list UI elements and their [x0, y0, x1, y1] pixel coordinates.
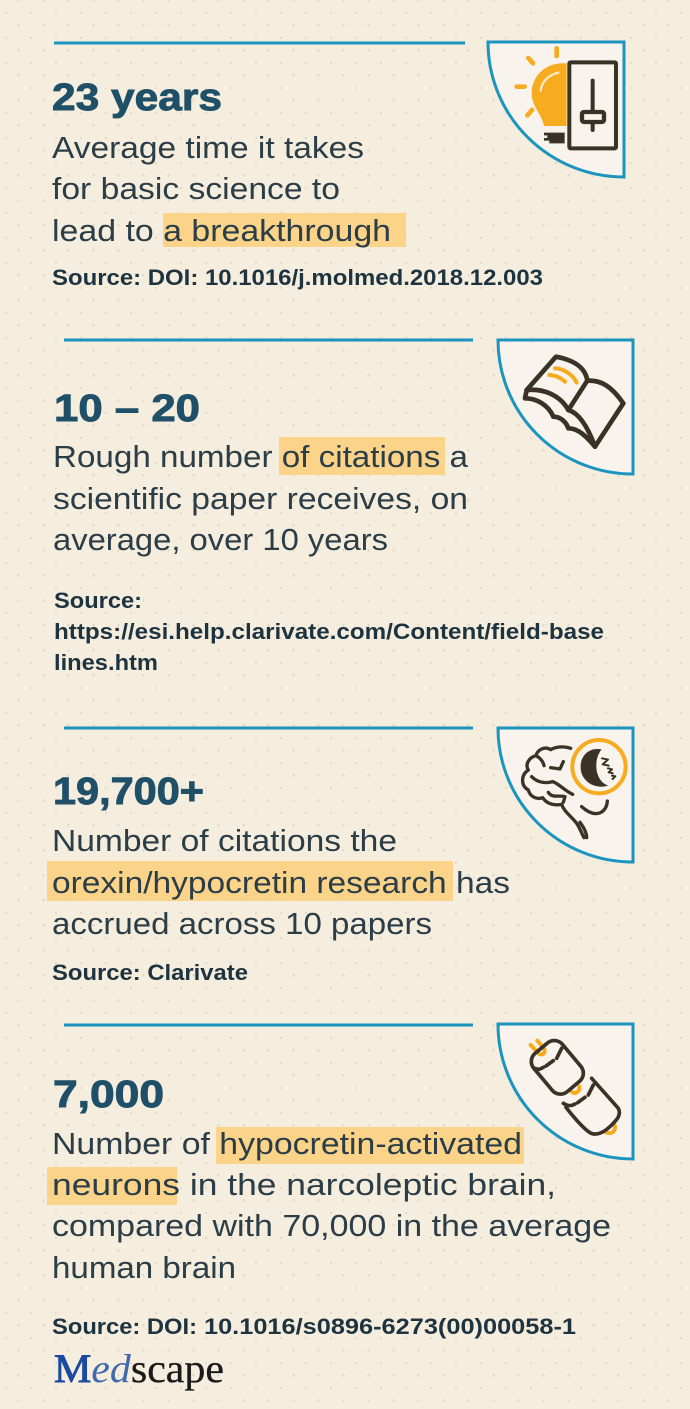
icon: open book — [498, 340, 633, 474]
text: description: Number of citations the — [52, 823, 397, 858]
text: description: lead to a breakthrough — [52, 213, 391, 248]
icon: neuron links — [498, 1024, 633, 1159]
text: description — [52, 130, 391, 248]
highlight: neurons — [47, 1167, 177, 1205]
icon: light bulb and switch — [488, 42, 624, 177]
text: description: for basic science to — [52, 171, 340, 206]
icon: brain and moon — [498, 728, 633, 862]
source: 10.1016/s0896-6273(00)00058-1 — [204, 1314, 576, 1339]
text: description — [53, 439, 469, 557]
heading: 19,700+: 19,700+ — [53, 771, 204, 813]
heading: 10 – 20: 10 – 20 — [54, 388, 200, 430]
logo: Medscape: Medscape — [54, 1346, 224, 1391]
text: description: neurons in the narcoleptic brain, — [52, 1167, 556, 1202]
source: Source: DOI: — [52, 1314, 197, 1339]
heading: 7,000: 7,000 — [53, 1074, 164, 1116]
text: description — [52, 1126, 611, 1285]
text: description: average, over 10 years — [53, 522, 388, 557]
source: lines.htm — [54, 650, 158, 675]
panel: 10 to 20 — [53, 338, 633, 675]
heading: 23 years: 23 years — [52, 77, 222, 119]
text: description: Average time it takes — [52, 130, 364, 165]
highlight: of citations — [279, 437, 445, 475]
source: Source: — [54, 588, 142, 613]
source — [54, 588, 604, 675]
source: Source: Clarivate — [52, 960, 248, 985]
source: Source: DOI: 10.1016/j.molmed.2018.12.003 — [52, 265, 543, 290]
text: description: scientific paper receives, on — [53, 481, 468, 516]
source: https://esi.help.clarivate.com/Content/field-base — [54, 619, 604, 644]
panel: 19,700+ — [47, 726, 633, 985]
text: description: Rough number of citations a — [53, 439, 469, 474]
text: description: orexin/hypocretin research has — [52, 865, 510, 900]
highlight: hypocretin-activated — [216, 1127, 524, 1164]
highlight: a breakthrough — [163, 213, 406, 247]
text: description: accrued across 10 papers — [52, 906, 432, 941]
text: description: compared with 70,000 in the average — [52, 1208, 611, 1243]
panel: 7,000 — [47, 1024, 633, 1339]
text: description: Number of hypocretin-activated — [52, 1126, 522, 1161]
highlight: orexin/hypocretin research — [47, 861, 453, 901]
panel: 23 years — [52, 42, 624, 290]
text: description — [52, 823, 510, 941]
source — [52, 1314, 576, 1339]
text: description: human brain — [52, 1250, 236, 1285]
